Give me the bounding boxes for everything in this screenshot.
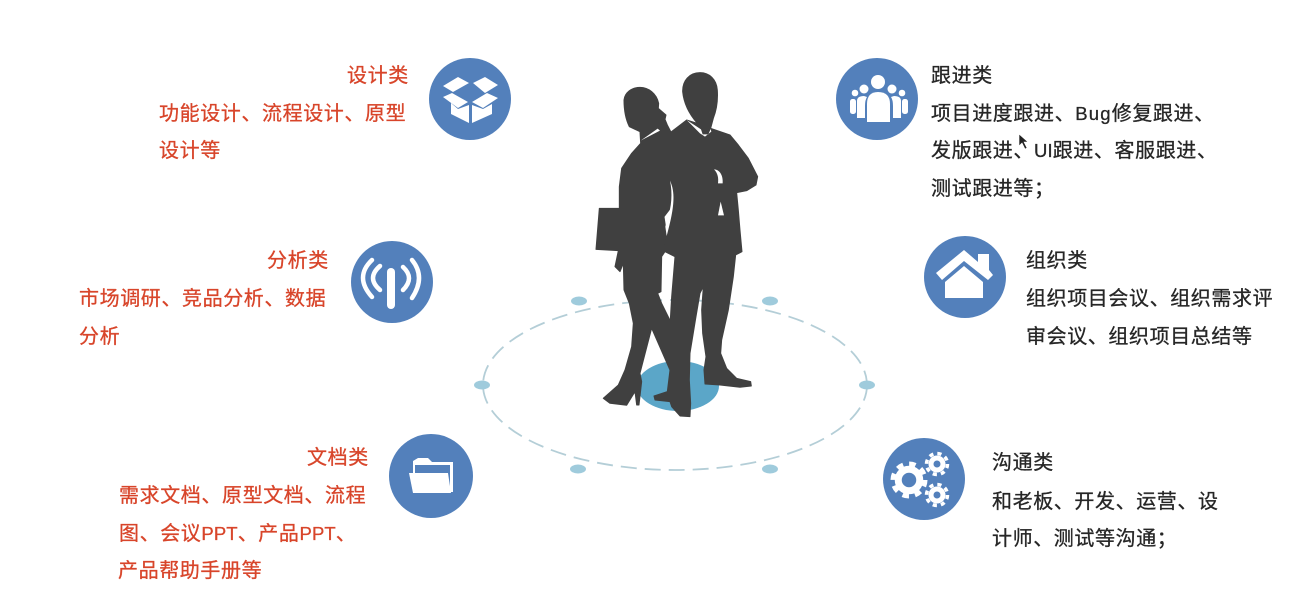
- panel: design: [159, 58, 511, 162]
- documents heading and text: [118, 446, 369, 582]
- icon: folder: [389, 434, 473, 518]
- follow-up heading and text: 跟进类: [931, 64, 993, 87]
- organizing heading and text: [1026, 249, 1273, 348]
- organizing heading and text: 组织类: [1026, 249, 1088, 272]
- documents heading and text: 图、会议PPT、产品PPT、: [119, 522, 356, 545]
- icon: box: [429, 58, 511, 140]
- communication heading and text: 和老板、开发、运营、设: [992, 490, 1219, 513]
- design heading and text: [159, 64, 409, 162]
- panel: analysis: [79, 241, 433, 348]
- follow-up heading and text: 发版跟进、UI跟进、客服跟进、: [931, 139, 1218, 162]
- orbit ring with nodes: [474, 296, 875, 474]
- panel: communication: [883, 438, 1219, 550]
- communication heading and text: 计师、测试等沟通；: [992, 527, 1177, 550]
- communication heading and text: 沟通类: [992, 451, 1054, 474]
- panel: documents: [118, 434, 473, 582]
- documents heading and text: 需求文档、原型文档、流程: [119, 484, 366, 507]
- follow-up heading and text: [931, 64, 1218, 200]
- design heading and text: 功能设计、流程设计、原型: [159, 102, 406, 125]
- icon: team: [836, 58, 918, 140]
- design heading and text: 设计类: [347, 64, 409, 87]
- panel: organizing: [924, 236, 1273, 348]
- organizing heading and text: 组织项目会议、组织需求评: [1026, 287, 1273, 310]
- icon: mouse cursor: [1019, 134, 1028, 149]
- follow-up heading and text: 测试跟进等；: [931, 177, 1055, 200]
- analysis heading and text: 市场调研、竞品分析、数据: [79, 287, 326, 310]
- communication heading and text: [992, 451, 1219, 550]
- silhouette: business woman and man: [596, 73, 758, 417]
- follow-up heading and text: 项目进度跟进、Bug修复跟进、: [931, 102, 1215, 125]
- design heading and text: 设计等: [159, 139, 221, 162]
- blue floor spot: [637, 361, 719, 411]
- organizing heading and text: 审会议、组织项目总结等: [1026, 325, 1253, 348]
- documents heading and text: 产品帮助手册等: [118, 559, 262, 582]
- analysis heading and text: 分析类: [267, 249, 329, 272]
- icon: signal: [351, 241, 433, 323]
- panel: follow-up: [836, 58, 1218, 200]
- analysis heading and text: [79, 249, 329, 348]
- analysis heading and text: 分析: [79, 325, 120, 348]
- icon: house: [924, 236, 1006, 318]
- documents heading and text: 文档类: [307, 446, 369, 469]
- icon: gears: [883, 438, 965, 520]
